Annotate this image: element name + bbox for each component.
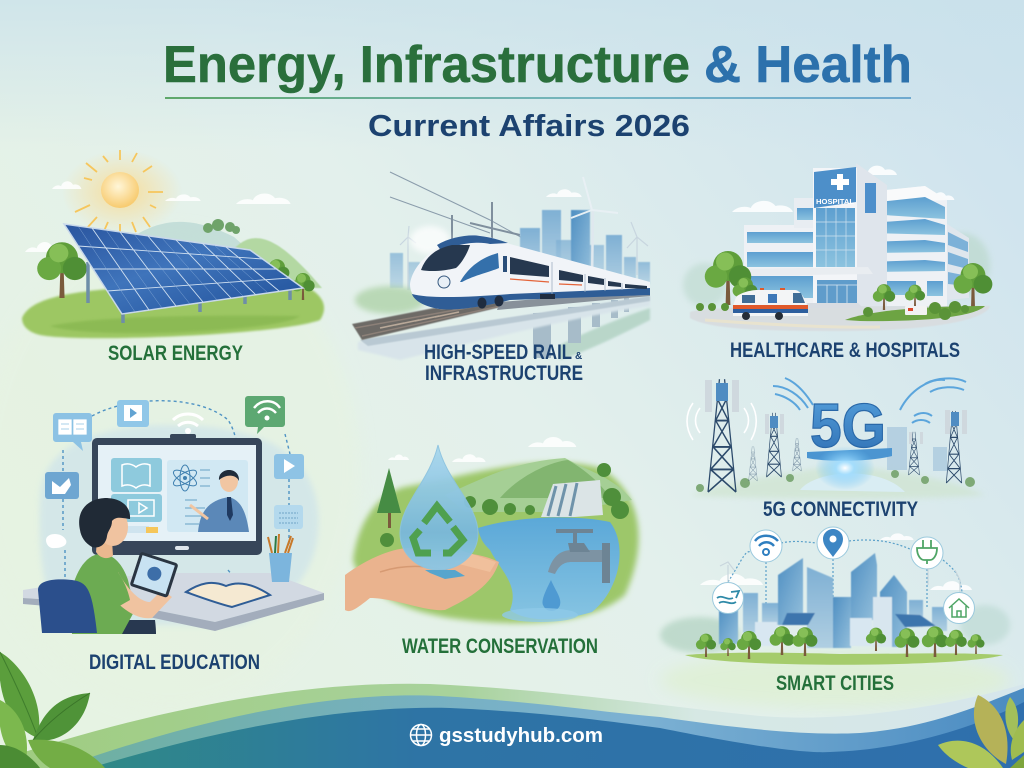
center tower <box>856 163 887 306</box>
illustration: hospital building <box>683 163 992 331</box>
illustration: city with connected icons <box>660 527 1010 708</box>
label: solar energy: SOLAR ENERGY <box>108 342 243 365</box>
panel: 5G connectivity <box>687 378 985 521</box>
desk <box>23 573 324 622</box>
book <box>186 583 270 607</box>
label: smart cities: SMART CITIES <box>776 672 894 695</box>
illustration: hospital building: HOSPITAL <box>816 197 854 206</box>
ambulance <box>733 288 808 320</box>
right wing <box>947 224 969 300</box>
label: 5G connectivity: 5G CONNECTIVITY <box>763 498 918 521</box>
illustration: 5G towers: 5G <box>810 392 886 461</box>
footer: website <box>410 724 603 747</box>
label: high-speed rail and infrastructure <box>424 341 583 385</box>
screen <box>92 438 262 555</box>
panel: solar energy <box>22 150 324 365</box>
water drop <box>400 445 478 570</box>
panel: smart cities <box>660 527 1010 708</box>
boy <box>38 498 179 634</box>
title: & Health <box>704 36 912 94</box>
footer wave <box>0 684 1024 768</box>
illustration: student at smart screen <box>23 396 324 634</box>
icon: globe <box>410 724 432 746</box>
decoration: right leaves <box>938 695 1024 768</box>
faucet <box>548 531 610 583</box>
subtitle: Current Affairs 2026 <box>368 108 690 143</box>
decoration: left leaves <box>0 652 105 768</box>
left wing <box>744 225 816 303</box>
title: Energy, Infrastructure <box>163 36 690 94</box>
label: healthcare and hospitals: HEALTHCARE & HOSPITALS <box>730 339 960 362</box>
title divider <box>165 97 911 99</box>
website text: gsstudyhub.com <box>439 725 603 747</box>
tablet <box>129 551 179 598</box>
illustration: water drop, hands and river <box>345 437 639 623</box>
illustration: train on viaduct with city <box>352 172 650 360</box>
illustration: solar panel landscape <box>22 150 324 338</box>
chair <box>38 579 97 633</box>
floating icons <box>53 413 92 451</box>
label: high-speed rail and infrastructure: HIGH-SPEED RAIL <box>424 341 572 364</box>
illustration: 5G towers <box>687 378 985 499</box>
hands <box>345 548 499 611</box>
pencil cup <box>268 534 293 553</box>
label: water conservation: WATER CONSERVATION <box>402 635 598 658</box>
label: high-speed rail and infrastructure: INFRASTRUCTURE <box>425 362 583 385</box>
panel: digital education <box>23 396 324 674</box>
label: digital education: DIGITAL EDUCATION <box>89 651 260 674</box>
panel: high-speed rail <box>352 172 650 385</box>
panel: healthcare and hospitals <box>683 163 992 362</box>
label: high-speed rail and infrastructure: & <box>575 351 582 362</box>
panel: water conservation <box>345 437 639 658</box>
